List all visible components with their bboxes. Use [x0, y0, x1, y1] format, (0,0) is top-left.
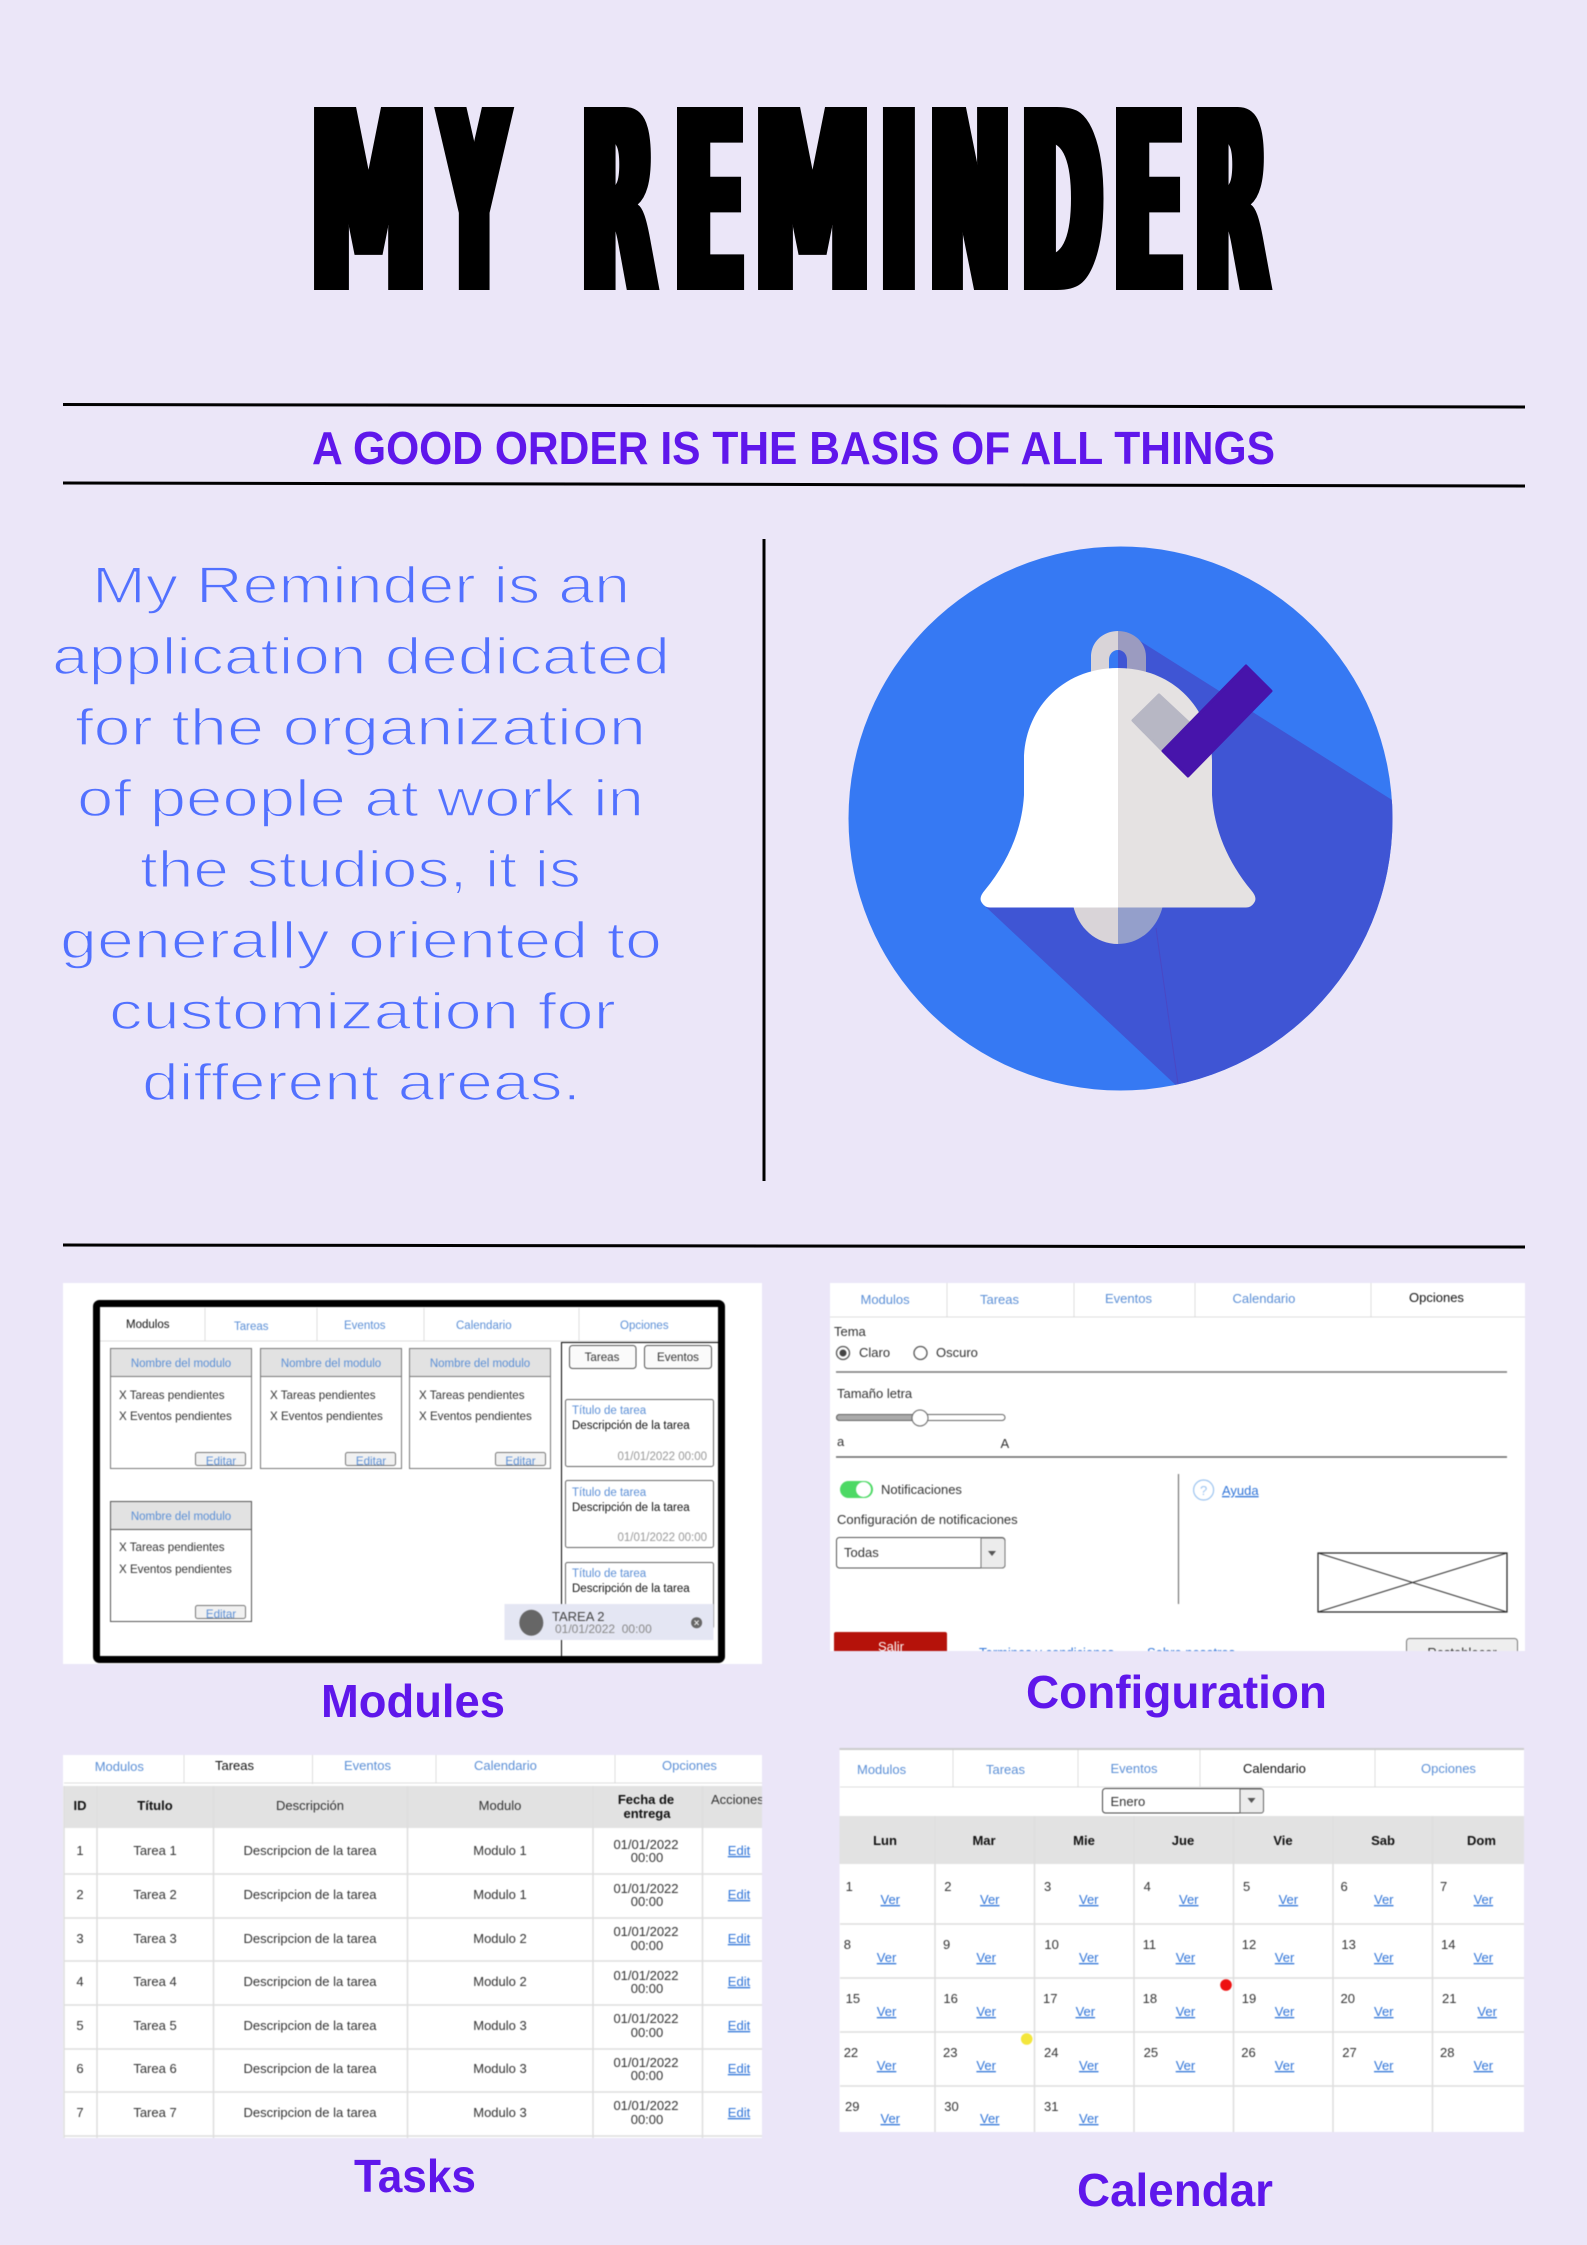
row 6: 6 [76, 2061, 84, 2076]
week 1: 2 [944, 1879, 952, 1894]
table header: Fecha de [618, 1792, 674, 1807]
help link [1194, 1480, 1259, 1500]
row 6: 00:00 [631, 2068, 663, 2083]
row 2: Modulo 1 [473, 1887, 527, 1902]
week 1: 7 [1440, 1879, 1447, 1894]
row 5: Tarea 5 [133, 2018, 177, 2033]
sidebar [562, 1342, 718, 1656]
calendar tabs: Modulos [857, 1762, 907, 1777]
week 4: 23 [943, 2045, 957, 2060]
row 4: Tarea 4 [133, 1974, 177, 1989]
week 5: 29 [845, 2099, 859, 2114]
panel: configuration screenshot [830, 1283, 1525, 1668]
row 1: Modulo 1 [473, 1843, 527, 1858]
row 3: Edit [728, 1931, 751, 1946]
row 5: 00:00 [631, 2025, 663, 2040]
image placeholder [1318, 1553, 1507, 1612]
text: R [1195, 58, 1267, 350]
label: tasks: Tasks [354, 2150, 476, 2202]
month select [1102, 1788, 1264, 1813]
footer buttons: Terminos y condiciones [979, 1645, 1115, 1660]
row 1: 00:00 [631, 1850, 663, 1865]
table header: Modulo [479, 1798, 521, 1813]
label: calendar: Calendar [1077, 2164, 1273, 2216]
toast notification: TAREA 2 [552, 1609, 605, 1624]
week 3: Ver [1176, 2004, 1196, 2019]
theme option: Tema [834, 1324, 867, 1339]
week 1: Ver [1474, 1892, 1494, 1907]
week 4: 22 [844, 2045, 858, 2060]
modules tabs: Opciones [620, 1320, 669, 1332]
row 7: 7 [76, 2105, 84, 2120]
row 4: 00:00 [631, 1981, 663, 1996]
module card 3 [410, 1348, 550, 1468]
row 6: 01/01/2022 [613, 2055, 679, 2070]
row 4: 4 [76, 1974, 84, 1989]
row 6: Modulo 3 [473, 2061, 527, 2076]
font size slider: a [837, 1434, 845, 1449]
week 3: Ver [877, 2004, 897, 2019]
description paragraph: customization for [109, 983, 616, 1041]
tasks tabs: Calendario [474, 1758, 537, 1773]
row 2: Tarea 2 [133, 1887, 177, 1902]
module card 3: Editar [505, 1455, 536, 1468]
footer buttons: Restablecer [1427, 1645, 1497, 1660]
sidebar: Título de tarea [572, 1405, 647, 1417]
font size slider: Tamaño letra [837, 1386, 913, 1401]
title: M [754, 58, 871, 350]
footer buttons: Salir [878, 1639, 905, 1654]
sidebar: Eventos [657, 1351, 699, 1364]
week 2: Ver [1275, 1950, 1295, 1965]
week 1: Ver [1279, 1892, 1299, 1907]
modules tabs: Modulos [126, 1319, 170, 1331]
row 2: Descripcion de la tarea [244, 1887, 377, 1902]
help link: ? [1200, 1483, 1207, 1498]
description paragraph [52, 557, 670, 1112]
week 1: 4 [1144, 1879, 1151, 1894]
week 3: Ver [1477, 2004, 1498, 2019]
week 4: 28 [1440, 2045, 1454, 2060]
week 4: 26 [1241, 2045, 1256, 2060]
week 2: 12 [1242, 1937, 1256, 1952]
calendar tabs [840, 1750, 1524, 1787]
week 4: Ver [1176, 2058, 1196, 2073]
week 2: 14 [1441, 1937, 1455, 1952]
week 4: Ver [1474, 2058, 1494, 2073]
week 4: Ver [1079, 2058, 1099, 2073]
week 2: Ver [1079, 1950, 1099, 1965]
week 4: Ver [1374, 2058, 1394, 2073]
title: R [582, 58, 654, 350]
week 3: 16 [943, 1991, 958, 2006]
week 2: Ver [976, 1950, 997, 1965]
module card 3: X Eventos pendientes [419, 1410, 532, 1423]
calendar tabs: Tareas [986, 1762, 1026, 1777]
configuration tabs: Calendario [1232, 1291, 1295, 1306]
sidebar: Tareas [585, 1351, 620, 1364]
label: configuration: Configuration [1026, 1666, 1327, 1718]
module card 2 [260, 1348, 402, 1468]
row 3: Descripcion de la tarea [244, 1931, 377, 1946]
row 1: Descripcion de la tarea [244, 1843, 377, 1858]
row 7: Edit [728, 2105, 751, 2120]
title: M [310, 58, 427, 350]
week 1: 1 [846, 1879, 853, 1894]
week 2: 9 [943, 1937, 950, 1952]
module card 1: Nombre del modulo [131, 1358, 231, 1370]
weekday header: Vie [1273, 1833, 1293, 1848]
weekday header: Sab [1371, 1833, 1395, 1848]
week 1: Ver [980, 1892, 1000, 1907]
row 3 [76, 1926, 751, 1951]
row 1: Tarea 1 [133, 1843, 177, 1858]
footer buttons [833, 1631, 1519, 1652]
module card 4 [110, 1502, 252, 1622]
row 3: Tarea 3 [133, 1931, 177, 1946]
label: modules: Modules [321, 1675, 505, 1727]
table header [64, 1786, 764, 1828]
week 1: 6 [1340, 1879, 1348, 1894]
tasks tabs: Eventos [344, 1758, 391, 1773]
week 2: 8 [844, 1937, 851, 1952]
week 1: Ver [880, 1892, 901, 1907]
row 5: Modulo 3 [473, 2018, 527, 2033]
week 4: Ver [877, 2058, 897, 2073]
sidebar: Descripción de la tarea [572, 1502, 690, 1514]
notifications settings: Todas [844, 1545, 879, 1560]
sidebar: 01/01/2022 00:00 [617, 1532, 707, 1544]
sidebar: 01/01/2022 00:00 [617, 1451, 707, 1463]
module card 3: X Tareas pendientes [419, 1389, 525, 1402]
row 7 [76, 2100, 751, 2125]
week 1: 3 [1044, 1879, 1051, 1894]
row 3: 3 [76, 1931, 84, 1946]
module card 1 [110, 1348, 252, 1468]
module card 2: X Tareas pendientes [270, 1389, 376, 1402]
description paragraph: generally oriented to [60, 912, 662, 970]
event marker: yellow [1021, 2033, 1032, 2045]
week 3 [846, 1991, 1498, 2019]
description paragraph: the studios, it is [140, 841, 581, 899]
panel: tasks screenshot [63, 1755, 764, 2138]
week 4: 24 [1044, 2045, 1058, 2060]
modules tabs [100, 1308, 718, 1341]
module card 4: X Tareas pendientes [119, 1541, 225, 1554]
module card 4: Editar [206, 1608, 236, 1621]
weekday header: Mar [972, 1833, 996, 1848]
row 1: Edit [728, 1843, 751, 1858]
module card 3: Nombre del modulo [430, 1358, 530, 1370]
row 4: Edit [728, 1974, 751, 1989]
row 7: 01/01/2022 [613, 2098, 679, 2113]
row 2: Edit [728, 1887, 751, 1902]
font size slider [836, 1386, 1010, 1451]
week 1 [846, 1879, 1494, 1907]
module card 4: Nombre del modulo [131, 1511, 231, 1523]
subtitle: A GOOD ORDER IS THE BASIS OF ALL THINGS [312, 422, 1275, 474]
row 3: 00:00 [631, 1938, 663, 1953]
modules tabs: Eventos [344, 1320, 386, 1332]
configuration tabs: Opciones [1409, 1290, 1464, 1305]
week 3: 21 [1442, 1991, 1456, 2006]
week 2: 10 [1044, 1937, 1059, 1952]
week 1: Ver [1179, 1892, 1199, 1907]
module card 4: X Eventos pendientes [119, 1563, 232, 1576]
row 7: Modulo 3 [473, 2105, 527, 2120]
week 1: Ver [1374, 1892, 1394, 1907]
title: N [930, 58, 1010, 350]
description paragraph: of people at work in [77, 770, 644, 828]
table header: Acciones [711, 1792, 764, 1807]
title: E [675, 58, 745, 350]
week 5: Ver [980, 2111, 1000, 2126]
row 1: 1 [76, 1843, 84, 1858]
week 2: Ver [1374, 1950, 1394, 1965]
configuration tabs: Eventos [1105, 1291, 1152, 1306]
description paragraph: for the organization [75, 699, 646, 757]
week 2: 13 [1341, 1937, 1356, 1952]
help link: Ayuda [1222, 1483, 1259, 1498]
week 5: Ver [1079, 2111, 1099, 2126]
configuration tabs [830, 1283, 1525, 1317]
sidebar: Título de tarea [572, 1487, 647, 1499]
table header: ID [74, 1798, 86, 1813]
title: E [1114, 58, 1184, 350]
week 5: 30 [944, 2099, 959, 2114]
calendar tabs: Opciones [1421, 1761, 1476, 1776]
week 3: 15 [846, 1991, 860, 2006]
sidebar: Título de tarea [572, 1568, 647, 1580]
week 1: Ver [1079, 1892, 1099, 1907]
row 6 [76, 2056, 751, 2081]
sidebar: Descripción de la tarea [572, 1583, 690, 1595]
tasks tabs: Modulos [95, 1759, 144, 1774]
weekday header: Jue [1172, 1833, 1194, 1848]
calendar tabs: Eventos [1110, 1761, 1158, 1776]
week 4 [844, 2045, 1494, 2073]
row 4 [76, 1970, 751, 1994]
tasks tabs [64, 1755, 762, 1784]
row 2 [76, 1882, 751, 1907]
week 2: Ver [1176, 1950, 1196, 1965]
footer buttons: Sobre nosotros [1147, 1645, 1236, 1660]
row 6: Edit [728, 2061, 751, 2076]
table header: entrega [624, 1806, 671, 1821]
icon: bell app logo [848, 546, 1400, 1100]
week 3: 19 [1242, 1991, 1256, 2006]
row 6: Descripcion de la tarea [244, 2061, 377, 2076]
week 4: Ver [976, 2058, 997, 2073]
sidebar: Descripción de la tarea [572, 1420, 690, 1432]
font size slider: A [1000, 1436, 1010, 1451]
row 6: Tarea 6 [133, 2061, 177, 2076]
row 4: Modulo 2 [473, 1974, 527, 1989]
week 1: 5 [1243, 1879, 1250, 1894]
row 5: Descripcion de la tarea [244, 2018, 377, 2033]
panel: modules screenshot [63, 1283, 762, 1664]
toast notification [504, 1604, 714, 1640]
theme option: Claro [859, 1345, 890, 1360]
notifications settings: Configuración de notificaciones [837, 1512, 1018, 1527]
table header: Título [137, 1798, 173, 1813]
title: Y [441, 58, 508, 350]
row 4: Descripcion de la tarea [244, 1974, 377, 1989]
description paragraph: My Reminder is an [92, 557, 630, 615]
row 3: 01/01/2022 [613, 1924, 679, 1939]
module card 2: X Eventos pendientes [270, 1410, 383, 1423]
weekday header: Lun [873, 1833, 897, 1848]
row 5 [76, 2012, 751, 2038]
week 3: Ver [976, 2004, 997, 2019]
row 1: 01/01/2022 [613, 1837, 679, 1852]
panel: calendar screenshot [840, 1748, 1524, 2132]
configuration tabs: Tareas [980, 1292, 1020, 1307]
row 2: 01/01/2022 [613, 1881, 679, 1896]
description paragraph: application dedicated [52, 628, 670, 686]
tasks tabs: Opciones [662, 1758, 717, 1773]
row 2: 00:00 [631, 1894, 663, 1909]
row 7: Tarea 7 [133, 2105, 177, 2120]
notifications settings: Notificaciones [881, 1482, 962, 1497]
calendar tabs: Calendario [1243, 1761, 1306, 1776]
event marker: red [1220, 1979, 1232, 1991]
weekday header: Dom [1467, 1833, 1496, 1848]
row 4: 01/01/2022 [613, 1968, 679, 1983]
week 5: 31 [1044, 2099, 1058, 2114]
week 3: 20 [1340, 1991, 1355, 2006]
row 5: 01/01/2022 [613, 2011, 679, 2026]
row 1 [76, 1838, 751, 1863]
module card 2: Editar [356, 1455, 386, 1468]
week 4: 25 [1144, 2045, 1158, 2060]
title: I [881, 58, 917, 350]
modules tabs: Tareas [234, 1321, 269, 1333]
week 3: Ver [1076, 2004, 1096, 2019]
title: D [1022, 58, 1102, 350]
week 5 [845, 2099, 1099, 2126]
row 5: Edit [728, 2018, 751, 2033]
module card 1: Editar [206, 1455, 236, 1468]
table header: Descripción [276, 1798, 344, 1813]
week 2 [844, 1937, 1494, 1965]
week 3: Ver [1275, 2004, 1295, 2019]
tasks tabs: Tareas [215, 1758, 255, 1773]
week 5: Ver [880, 2111, 901, 2126]
theme option [834, 1324, 978, 1360]
row 2: 2 [76, 1887, 84, 1902]
week 2: Ver [1474, 1950, 1494, 1965]
week 2: 11 [1143, 1937, 1156, 1952]
row 5: 5 [76, 2018, 84, 2033]
week 3: 18 [1143, 1991, 1157, 2006]
modules tabs: Calendario [456, 1320, 512, 1332]
week 4: Ver [1275, 2058, 1295, 2073]
week 3: 17 [1043, 1991, 1057, 2006]
week 3: Ver [1374, 2004, 1394, 2019]
weekday header [840, 1816, 1524, 1864]
description paragraph: different areas. [142, 1054, 581, 1112]
row 7: 00:00 [631, 2112, 663, 2127]
module card 2: Nombre del modulo [281, 1358, 381, 1370]
month select: Enero [1110, 1794, 1145, 1809]
weekday header: Mie [1073, 1833, 1095, 1848]
module card 1: X Eventos pendientes [119, 1410, 232, 1423]
row 3: Modulo 2 [473, 1931, 527, 1946]
module card 1: X Tareas pendientes [119, 1389, 225, 1402]
week 4: 27 [1342, 2045, 1357, 2060]
theme option: Oscuro [936, 1345, 978, 1360]
row 7: Descripcion de la tarea [244, 2105, 377, 2120]
configuration tabs: Modulos [860, 1292, 910, 1307]
notifications settings [836, 1481, 1018, 1568]
toast notification: 01/01/2022 00:00 [555, 1622, 652, 1636]
week 2: Ver [877, 1950, 897, 1965]
